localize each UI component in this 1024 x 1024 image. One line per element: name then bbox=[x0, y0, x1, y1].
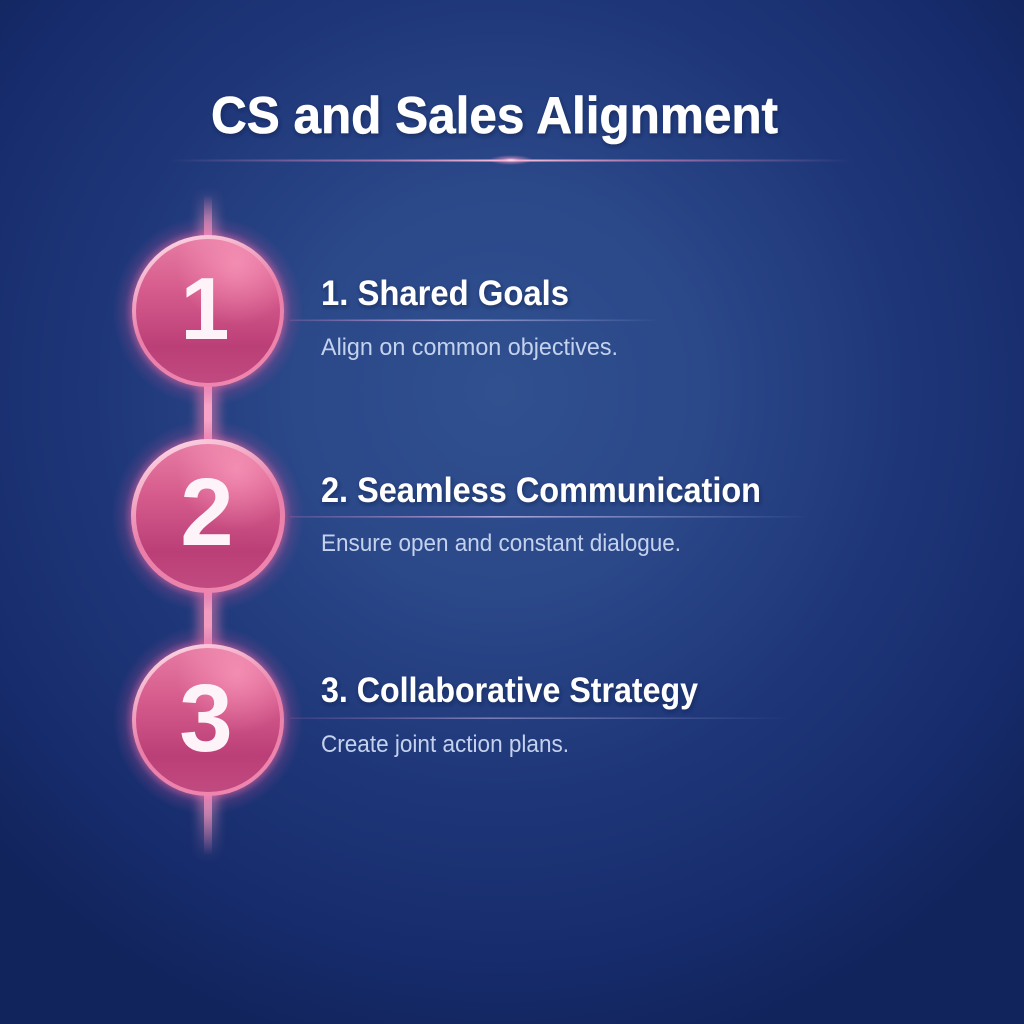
step 2 badge bbox=[112, 420, 304, 612]
number 1: 1 bbox=[181, 259, 229, 358]
step 3 description: Create joint action plans. bbox=[321, 731, 569, 758]
timeline spine bbox=[197, 190, 219, 860]
step 3 heading: 3. Collaborative Strategy bbox=[321, 671, 698, 710]
step 1 text bbox=[290, 274, 660, 361]
number 3: 3 bbox=[179, 665, 233, 772]
step 2 text bbox=[290, 471, 810, 557]
step 3 divider bbox=[290, 718, 790, 719]
number 2: 2 bbox=[180, 459, 234, 566]
step 1 divider bbox=[290, 320, 660, 321]
step 1 description: Align on common objectives. bbox=[321, 334, 618, 361]
title underline with glow bbox=[170, 155, 850, 165]
step 2 divider bbox=[290, 516, 810, 518]
step 2 heading: 2. Seamless Communication bbox=[321, 471, 761, 510]
step 1 heading: 1. Shared Goals bbox=[321, 274, 569, 313]
step 3 text bbox=[290, 671, 790, 758]
title: CS and Sales Alignment bbox=[211, 87, 778, 145]
step 2 description: Ensure open and constant dialogue. bbox=[321, 530, 681, 557]
step 1 badge bbox=[113, 216, 303, 406]
step 3 badge bbox=[113, 625, 303, 815]
